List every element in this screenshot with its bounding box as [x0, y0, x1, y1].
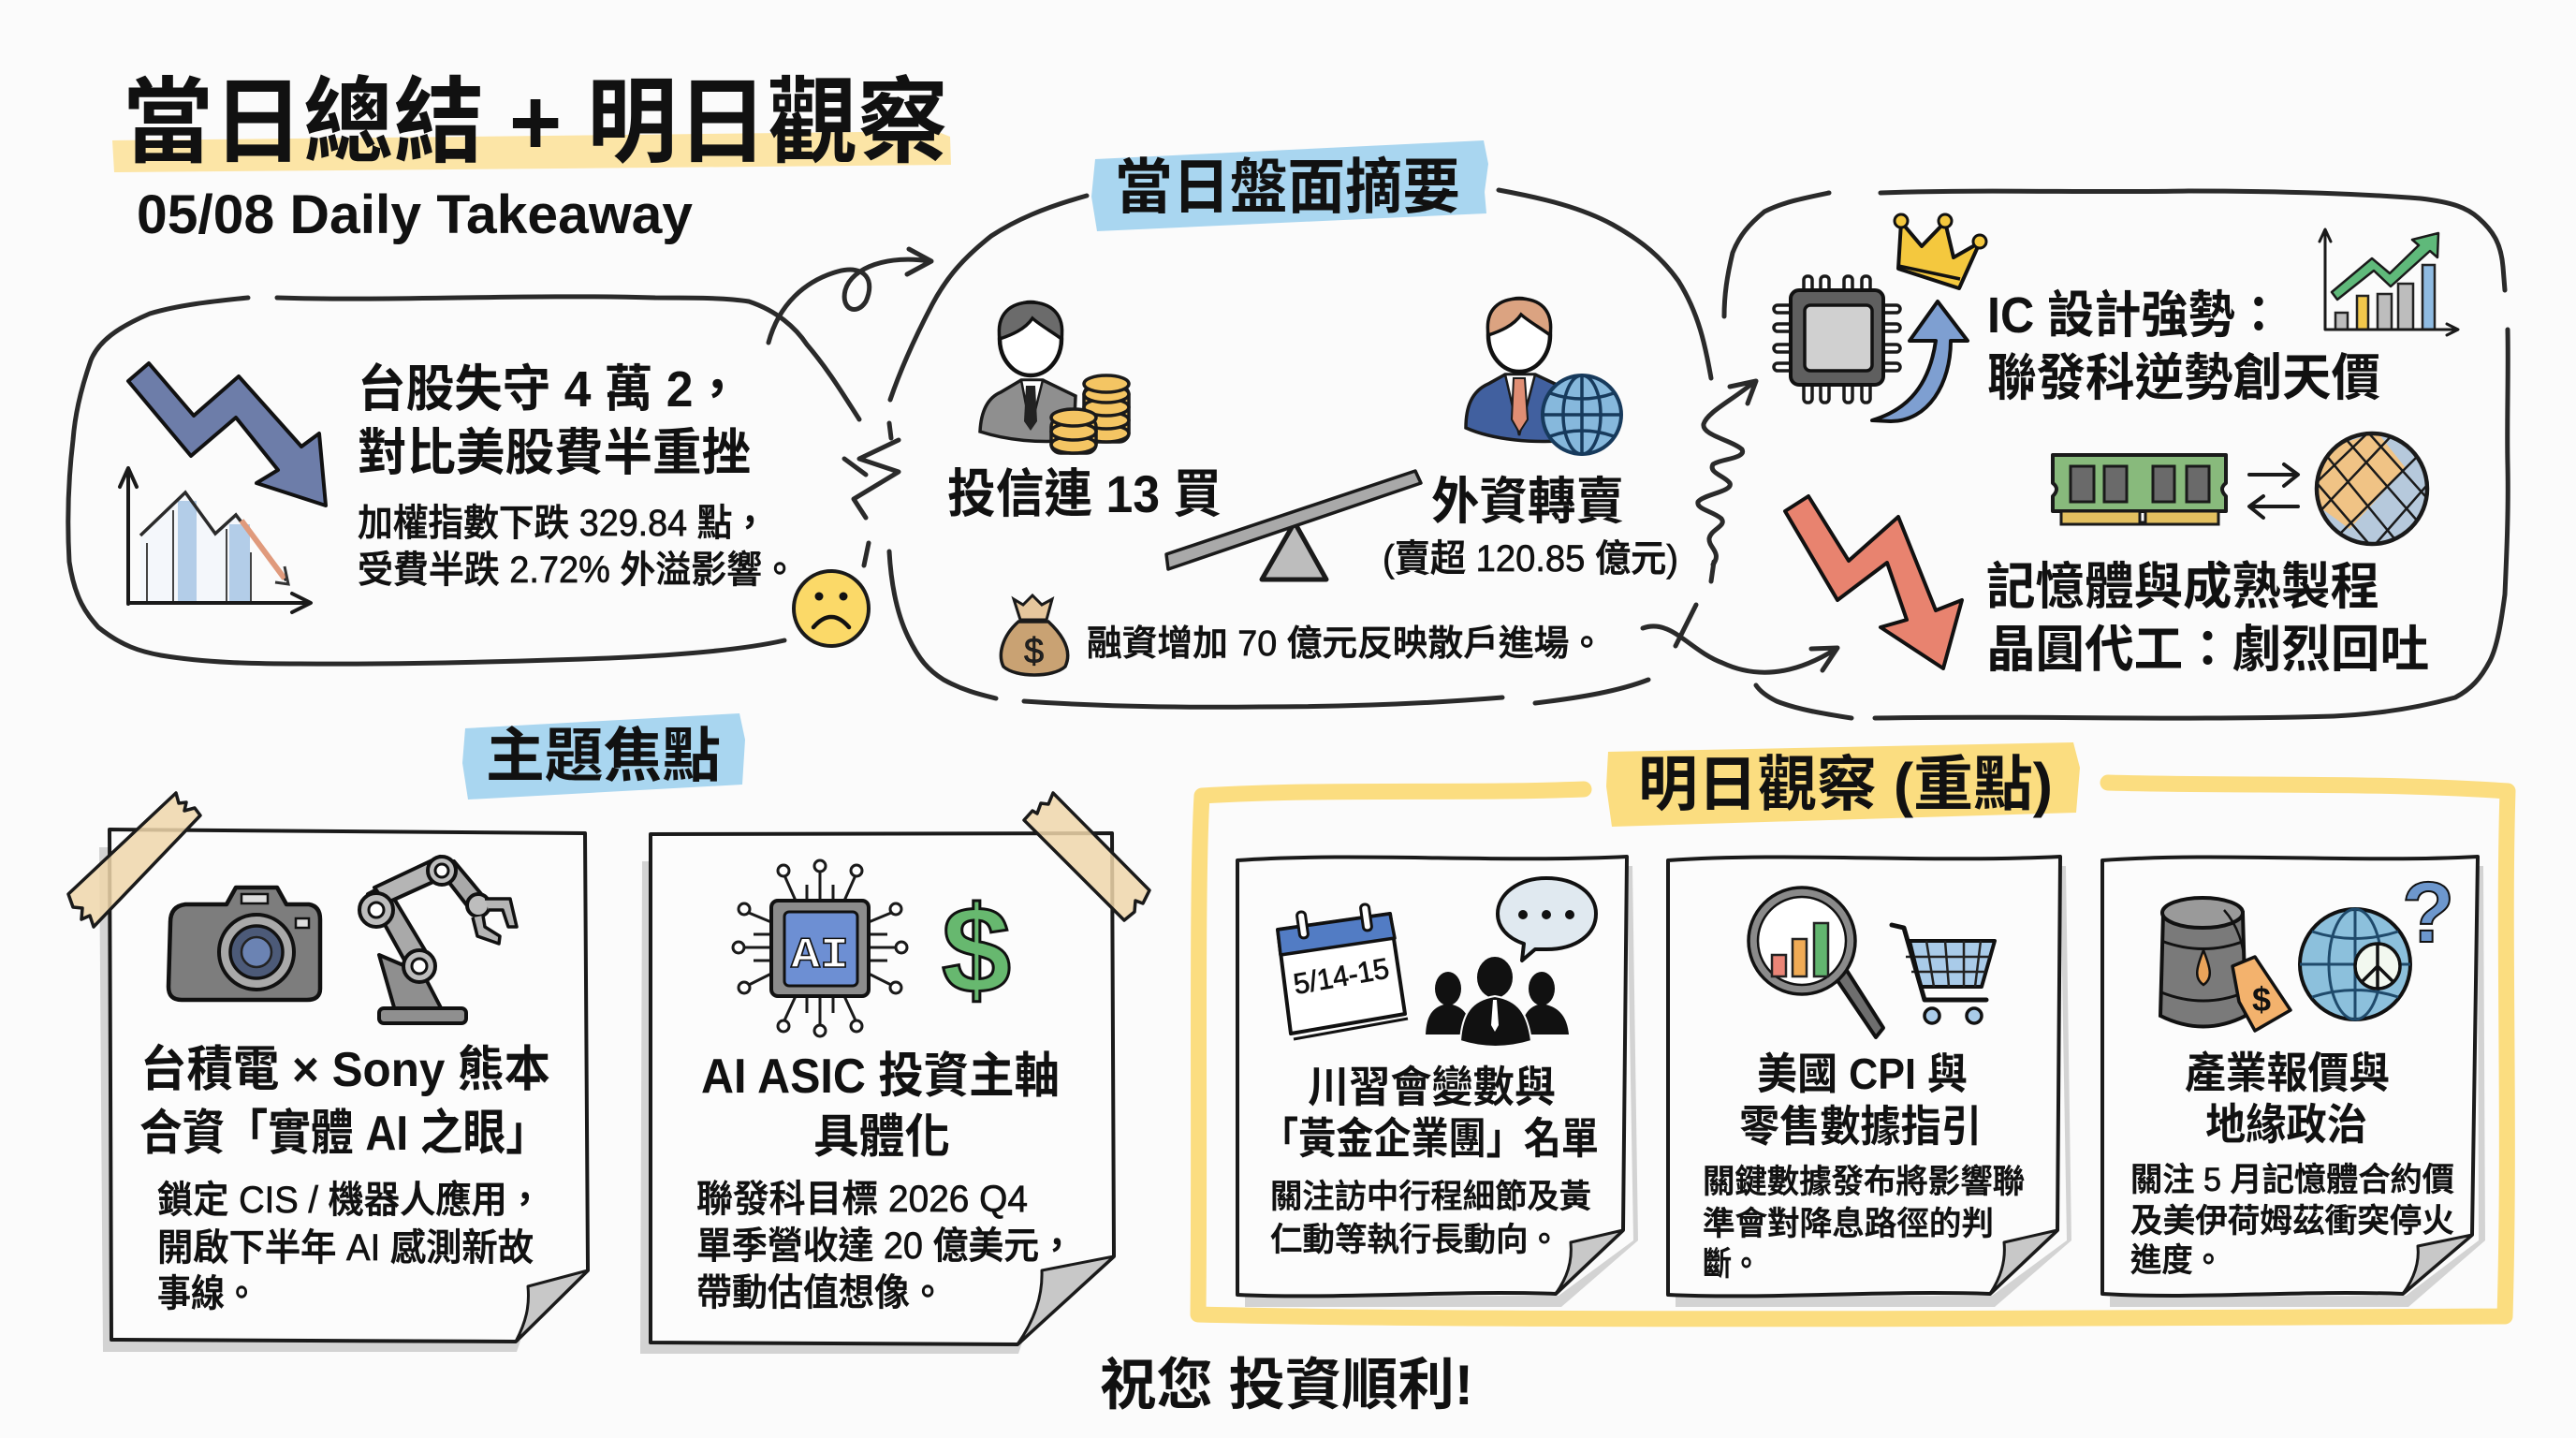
heading highlight [1091, 140, 1488, 231]
title block [112, 70, 951, 245]
card shadow [2110, 866, 2485, 1307]
heading: 主題焦點 [486, 724, 721, 789]
icon: executives [1426, 957, 1569, 1047]
tape [68, 793, 200, 927]
card shadow [1245, 866, 1638, 1307]
card heading: 零售數據指引 [1739, 1102, 1982, 1151]
card body: 準會對降息路徑的判 [1703, 1206, 1994, 1242]
panel: market drop [68, 297, 891, 664]
card body: 關注 5 月記憶體合約價 [2130, 1162, 2454, 1198]
icon: dollar sign: $ [942, 881, 1011, 1019]
heading: memory and mature process [1986, 559, 2429, 678]
icon: investor trust person with coins [980, 302, 1129, 453]
panel heading: 台股失守 4 萬 2， [358, 361, 741, 418]
card sheet [1668, 857, 2060, 1296]
section: tomorrow watch [1198, 742, 2508, 1319]
panel heading [358, 361, 751, 481]
panel outline [889, 190, 1714, 707]
card body: 及美伊荷姆茲衝突停火 [2130, 1203, 2454, 1240]
icon: calendar: 5/14-15 [1291, 952, 1392, 1001]
icon: rising bar chart [2320, 229, 2458, 335]
card heading: 產業報價與 [2185, 1049, 2390, 1097]
icon: falling blue arrow [128, 363, 326, 506]
icon: foreign investor person with globe [1466, 299, 1621, 454]
card fold [2403, 1235, 2472, 1294]
card body: 仁動等執行長動向。 [1270, 1222, 1560, 1258]
card heading [701, 1049, 1060, 1163]
card body [696, 1179, 1075, 1313]
card body [157, 1180, 543, 1314]
card heading [139, 1043, 550, 1161]
icon: crown [1895, 214, 1986, 288]
heading highlight [462, 713, 745, 800]
icon: chip [1774, 276, 1900, 403]
panel: sector moves [1724, 191, 2508, 718]
card shadow [640, 861, 1022, 1354]
icon: wafer [2314, 431, 2430, 547]
card heading: 地緣政治 [2205, 1100, 2367, 1149]
card heading: 合資「實體 AI 之眼」 [139, 1107, 549, 1161]
label: net sell amount: (賣超 120.85 億元) [1383, 538, 1678, 580]
card body [2130, 1162, 2454, 1279]
arrow: curly arrow to summary [768, 249, 931, 343]
panel heading: 對比美股費半重挫 [358, 425, 751, 481]
card body: 事線。 [157, 1273, 258, 1314]
arrow: lower curve to sectors [1643, 626, 1837, 672]
card heading: 美國 CPI 與 [1757, 1049, 1968, 1098]
heading: IC design [1987, 287, 2380, 406]
icon: speech bubble [1498, 878, 1596, 961]
card sheet [110, 829, 588, 1342]
icon: sad face [794, 571, 869, 646]
card: industry and geopolitics [2102, 857, 2485, 1307]
card body: 開啟下半年 AI 感測新故 [157, 1227, 534, 1269]
panel outline [1724, 191, 2508, 718]
icon: oil barrel [2160, 898, 2246, 1026]
icon: memory module [2053, 455, 2226, 524]
icon: small declining chart [120, 468, 311, 612]
card body: 進度。 [2130, 1242, 2224, 1279]
icon: money bag [1001, 595, 1068, 675]
heading: memory and mature process: 記憶體與成熟製程 [1986, 559, 2379, 615]
card heading [2185, 1049, 2390, 1149]
icon: magnifier with bars [1749, 888, 1883, 1037]
heading: 明日觀察 (重點) [1638, 751, 2053, 818]
yellow frame [1198, 783, 2508, 1319]
card body: 關注訪中行程細節及黃 [1270, 1179, 1591, 1215]
icon: falling red arrow [1785, 496, 1962, 668]
title highlight [112, 131, 951, 172]
icon: robot arm [359, 857, 517, 1023]
title: 當日總結 + 明日觀察 [123, 70, 948, 175]
section: theme focus [68, 713, 1149, 1354]
panel: daily market summary [889, 140, 1714, 707]
icon: camera [168, 888, 320, 1000]
card shadow [99, 847, 520, 1352]
card: US CPI [1668, 857, 2071, 1307]
card: AI ASIC [640, 793, 1149, 1354]
card body: 帶動估值想像。 [696, 1272, 945, 1313]
card fold [1990, 1230, 2057, 1294]
card: TSMC Sony [68, 793, 588, 1352]
card body [1270, 1179, 1591, 1258]
card heading: 台積電 × Sony 熊本 [140, 1043, 550, 1097]
card shadow [1676, 866, 2071, 1307]
card sheet [2102, 857, 2478, 1296]
card body: 鎖定 CIS / 機器人應用， [157, 1180, 543, 1221]
card heading: 川習會變數與 [1308, 1063, 1556, 1111]
closing message: 祝您 投資順利! [1100, 1354, 1473, 1416]
card fold [1017, 1256, 1114, 1344]
card sheet [1237, 857, 1627, 1296]
card body: 單季營收達 20 億美元， [696, 1225, 1075, 1267]
card body: 斷。 [1703, 1246, 1761, 1283]
card heading [1261, 1063, 1599, 1163]
heading highlight [1606, 742, 2080, 827]
callout: margin text: 融資增加 70 億元反映散戶進場。 [1087, 624, 1604, 664]
label: foreign selling: 外資轉賣 [1431, 474, 1624, 530]
card heading: 「黃金企業團」名單 [1261, 1114, 1599, 1163]
card sheet [651, 833, 1114, 1344]
subtitle: 05/08 Daily Takeaway [137, 184, 693, 245]
arrow: zigzag crack between panels [844, 440, 899, 518]
heading: 當日盤面摘要 [1115, 154, 1460, 221]
heading: memory and mature process: 晶圓代工：劇烈回吐 [1986, 622, 2429, 678]
tape [1024, 793, 1149, 920]
icon: exchange arrows [2249, 464, 2298, 518]
panel body text: 加權指數下跌 329.84 點， [358, 503, 768, 544]
icon: peace globe [2300, 909, 2410, 1020]
icon: question mark: ? [2402, 865, 2454, 961]
panel body text [358, 503, 798, 591]
icon: shopping cart [1892, 925, 1995, 1023]
icon: AI chip [733, 860, 907, 1036]
panel outline [68, 297, 891, 664]
card fold [1556, 1230, 1623, 1294]
card heading [1739, 1049, 1982, 1151]
card body: 聯發科目標 2026 Q4 [696, 1179, 1028, 1220]
card: Trump Xi summit [1237, 857, 1638, 1307]
icon: price tag [2232, 957, 2291, 1031]
card fold [516, 1270, 588, 1342]
label: trust buying: 投信連 13 買 [947, 464, 1222, 523]
icon: price tag: $ [2252, 980, 2271, 1019]
icon: rising blue arrow [1872, 301, 1968, 421]
heading: IC design: 聯發科逆勢創天價 [1987, 350, 2380, 406]
icon: calendar [1278, 903, 1408, 1039]
card heading: AI ASIC 投資主軸 [701, 1049, 1060, 1104]
icon: AI chip: AI [791, 932, 849, 980]
icon: money bag: $ [1024, 632, 1044, 671]
heading: IC design: IC 設計強勢： [1987, 287, 2282, 344]
card body [1703, 1164, 2025, 1283]
card heading: 具體化 [813, 1110, 950, 1163]
icon: seesaw [1166, 471, 1421, 580]
arrow: wavy arrow to sectors [1698, 381, 1756, 565]
panel body text: 受費半跌 2.72% 外溢影響。 [358, 550, 798, 591]
card body: 關鍵數據發布將影響聯 [1703, 1164, 2025, 1200]
